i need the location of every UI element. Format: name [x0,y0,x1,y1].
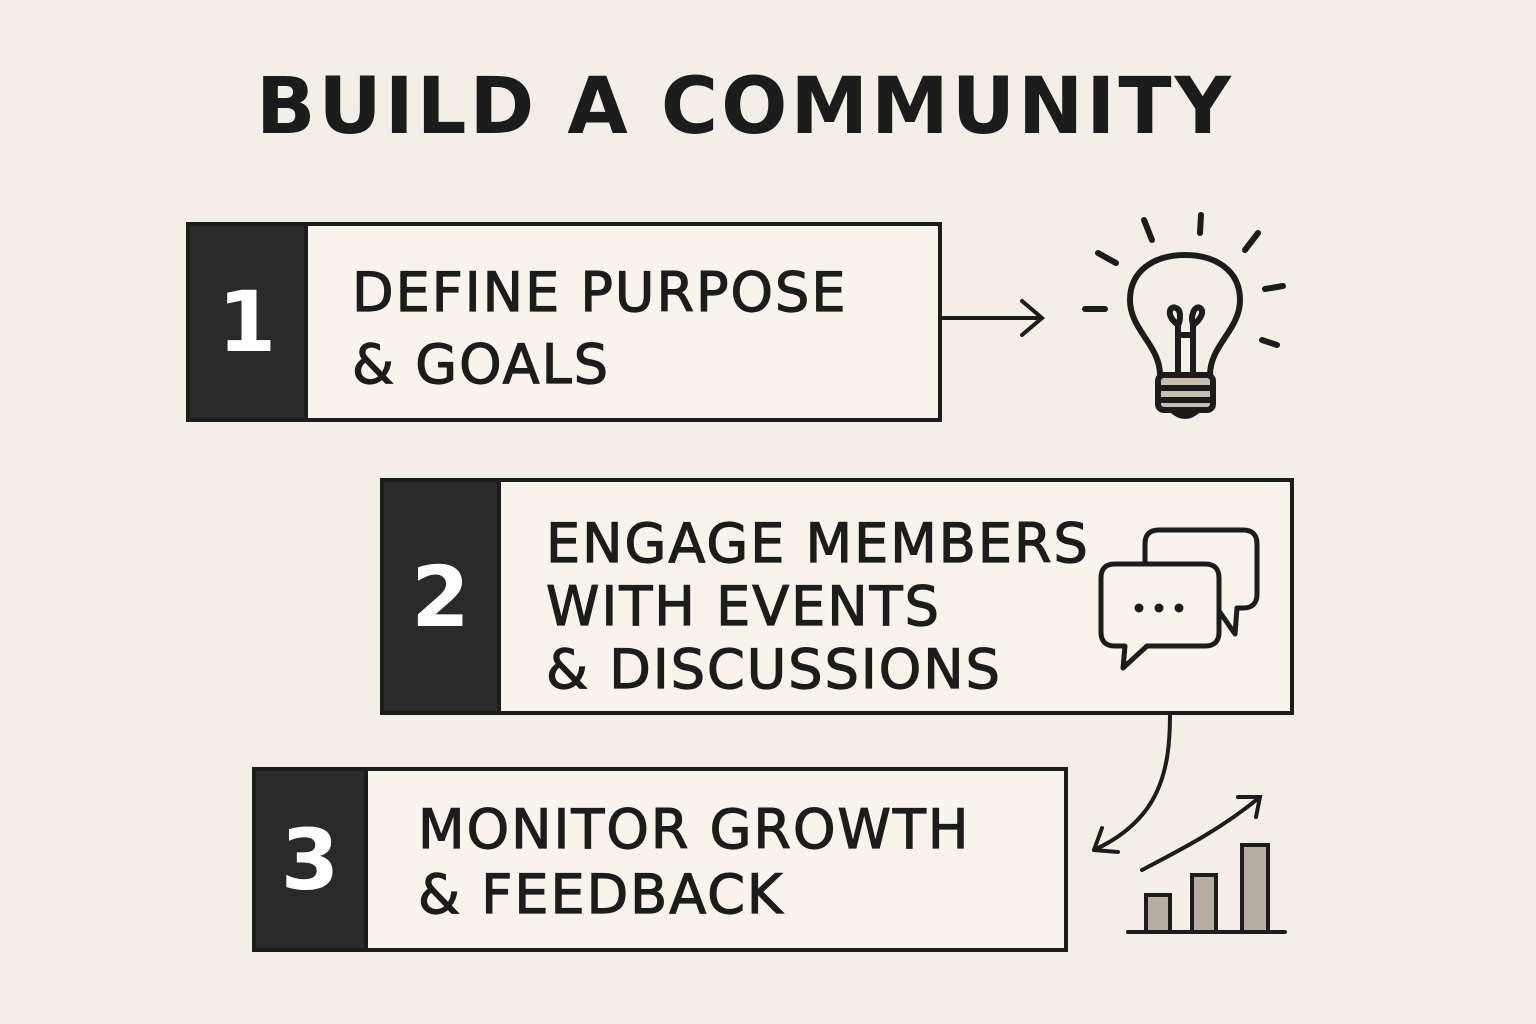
text: step 3: MONITOR GROWTH [418,798,970,861]
panel: step 1 [186,222,942,422]
icon: speech bubbles [1098,528,1260,670]
text: step 1: & GOALS [352,333,610,396]
text: step 1: DEFINE PURPOSE [352,261,847,324]
arrow: step 1 to bulb [942,298,1045,338]
number 1 [190,226,308,418]
number 1: 1 [218,273,276,371]
text: step 2: & DISCUSSIONS [546,638,1002,701]
number 2: 2 [411,548,470,646]
icon: growth chart [1126,794,1287,934]
panel: step 3 [252,767,1068,952]
text: step 2 [546,512,1090,701]
text: step 1 [352,261,847,396]
icon: lightbulb [1082,212,1286,419]
number 3 [256,771,368,948]
panel: step 2 [380,478,1294,715]
text: step 3: & FEEDBACK [418,863,784,926]
text: step 3 [418,798,970,926]
text: step 2: ENGAGE MEMBERS [546,512,1090,575]
arrow: step 2 to step 3 [1092,715,1172,854]
number 2 [384,482,501,711]
title: BUILD A COMMUNITY [256,62,1234,152]
number 3: 3 [281,810,339,908]
text: step 2: WITH EVENTS [546,575,941,638]
